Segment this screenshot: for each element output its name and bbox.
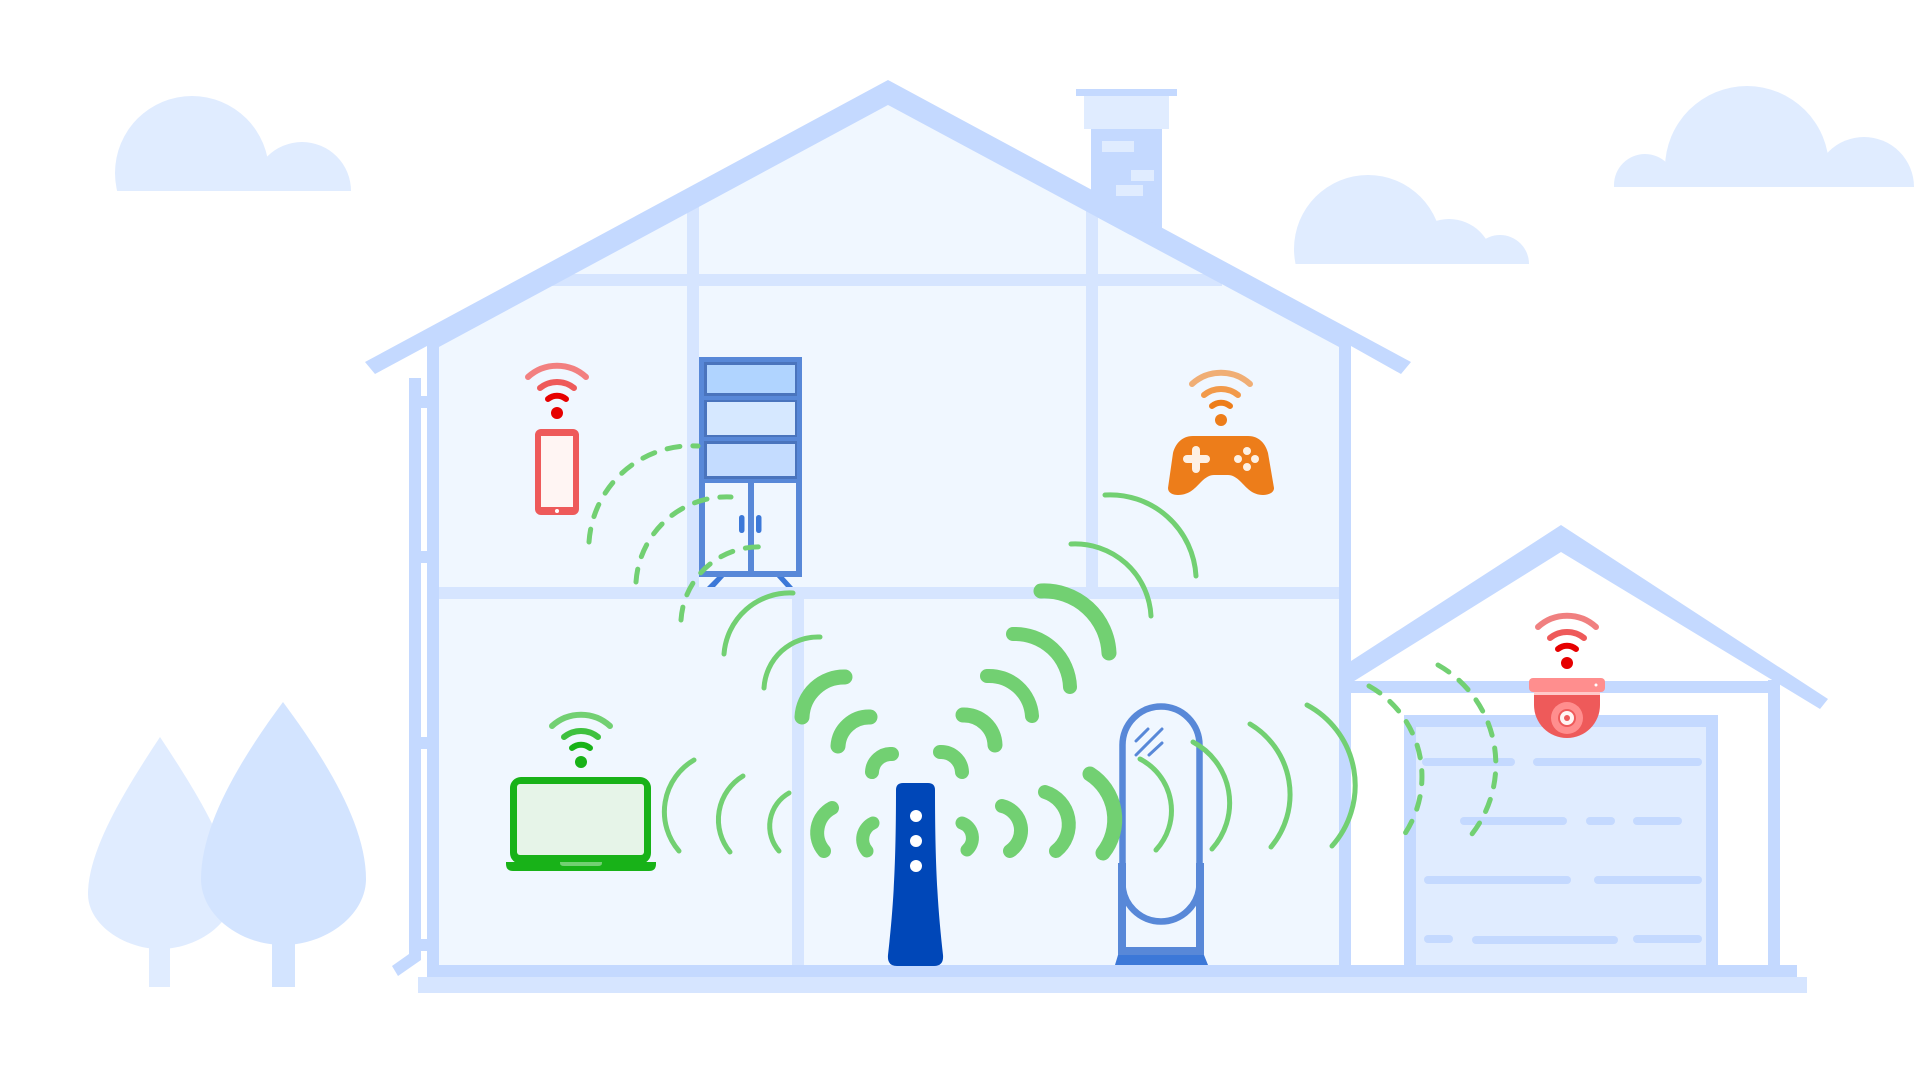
ground floor slab bbox=[418, 965, 1807, 993]
tree: small bbox=[88, 737, 233, 987]
house framing: studs and beams bbox=[439, 205, 1339, 965]
signal waves: toward phone bbox=[589, 446, 892, 772]
signal waves: toward laptop bbox=[664, 760, 873, 852]
icon: game controller with wifi bbox=[1168, 373, 1274, 495]
cloud: centre right bbox=[1294, 175, 1529, 264]
house side ladder and walls bbox=[392, 340, 1351, 976]
garage door bbox=[1404, 715, 1718, 965]
icon: air purifier bbox=[1115, 706, 1208, 965]
cloud: top right bbox=[1614, 86, 1914, 187]
cloud: top left bbox=[115, 96, 351, 191]
signal waves: toward garage bbox=[962, 665, 1496, 853]
signal waves: toward game controller bbox=[940, 495, 1196, 772]
house roof bbox=[365, 80, 1411, 374]
icon: wifi router bbox=[888, 783, 943, 966]
house interior bbox=[439, 105, 1339, 965]
icon: security camera with wifi bbox=[1529, 616, 1605, 738]
icon: laptop with wifi bbox=[506, 715, 656, 871]
chimney bbox=[1076, 89, 1177, 235]
garage structure bbox=[1351, 525, 1828, 965]
icon: phone with wifi bbox=[528, 366, 586, 515]
icon: bookshelf bbox=[699, 357, 802, 587]
tree: large bbox=[201, 702, 366, 987]
